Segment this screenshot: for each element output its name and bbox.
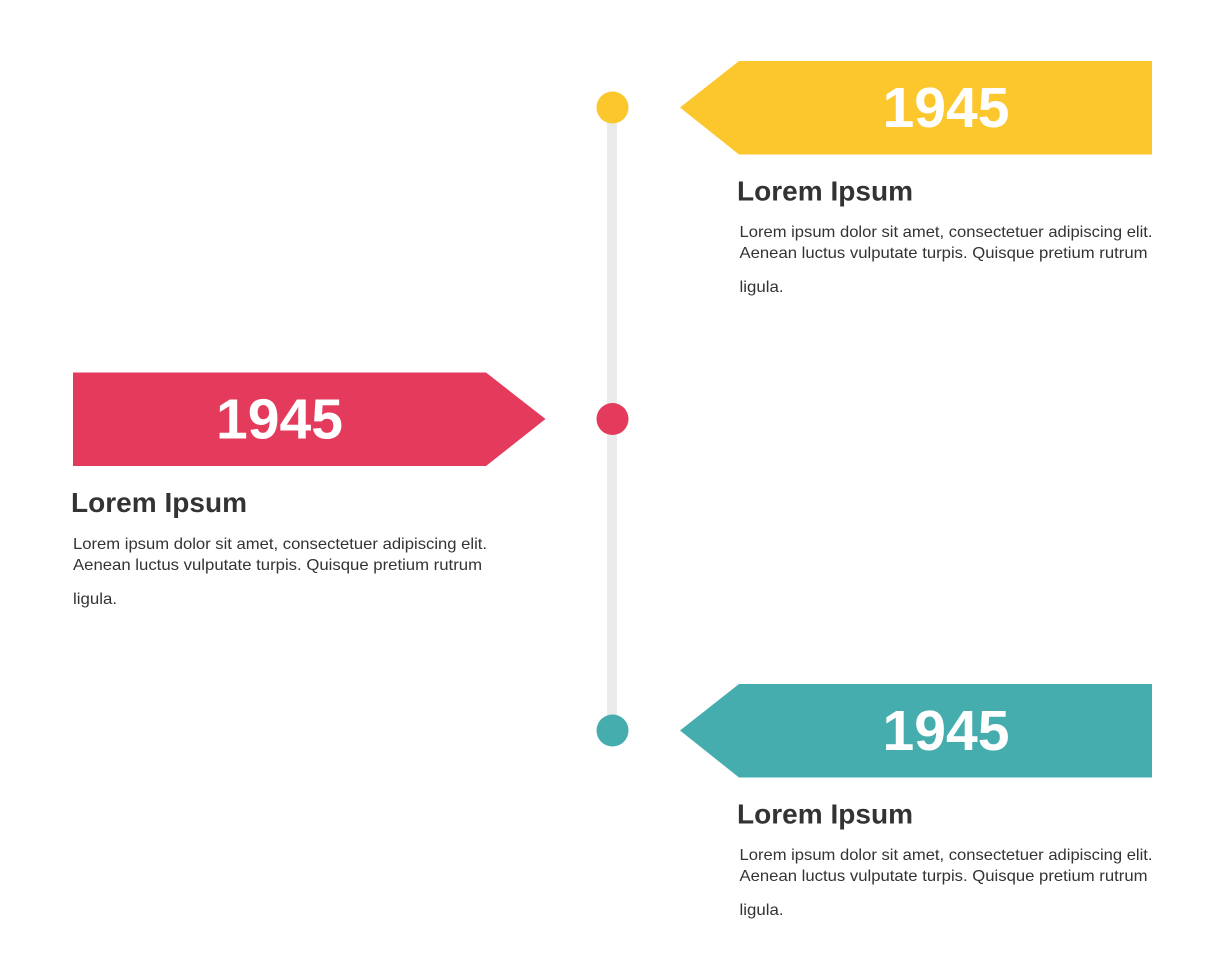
body text: Lorem ipsum dolor sit amet, consectetuer adipiscing elit.: [740, 224, 1152, 241]
arrow banner: yellow: [680, 61, 1152, 154]
body text: ligula.: [73, 591, 117, 608]
heading: Lorem Ipsum: [737, 798, 913, 830]
body text: Lorem ipsum dolor sit amet, consectetuer adipiscing elit.: [73, 536, 487, 553]
body text: Aenean luctus vulputate turpis. Quisque pretium rutrum: [740, 245, 1148, 262]
event: bottom teal: [680, 684, 1152, 919]
timeline dot: yellow: [596, 92, 628, 124]
heading: Lorem Ipsum: [737, 176, 913, 206]
year label: 1945: [216, 388, 343, 452]
body text: Aenean luctus vulputate turpis. Quisque pretium rutrum: [740, 868, 1148, 885]
body text: [740, 224, 1152, 296]
body text: Lorem ipsum dolor sit amet, consectetuer adipiscing elit.: [740, 847, 1152, 864]
body text: Aenean luctus vulputate turpis. Quisque pretium rutrum: [73, 557, 482, 574]
body text: ligula.: [740, 279, 784, 296]
heading: Lorem Ipsum: [71, 487, 247, 518]
timeline vertical line: [607, 108, 617, 730]
arrow banner: red: [73, 372, 546, 466]
body text: [73, 536, 487, 608]
body text: [740, 847, 1152, 919]
arrow banner: teal: [680, 684, 1152, 778]
timeline dot: red: [596, 403, 628, 435]
body text: ligula.: [740, 902, 784, 919]
timeline dot: teal: [596, 714, 628, 746]
event: middle red: [71, 372, 546, 608]
year label: 1945: [882, 699, 1010, 763]
year label: 1945: [882, 76, 1010, 140]
event: top yellow: [680, 61, 1152, 296]
